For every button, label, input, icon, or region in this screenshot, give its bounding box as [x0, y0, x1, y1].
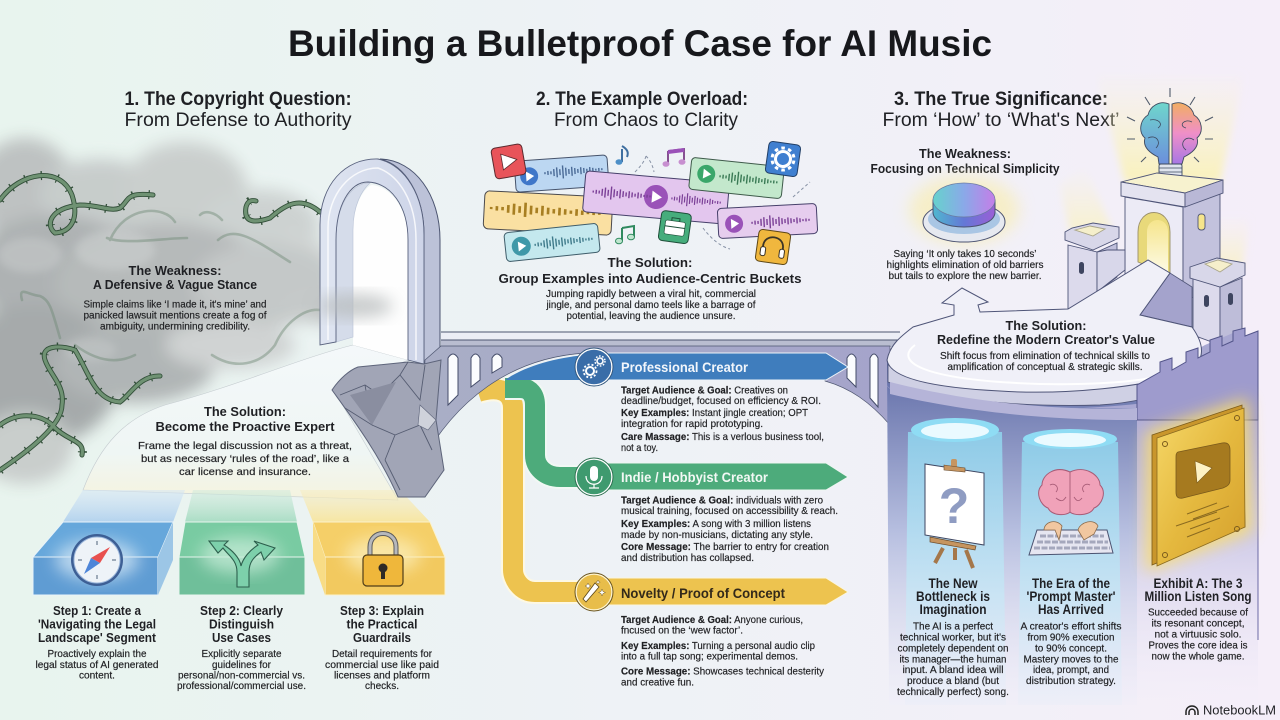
text: professional creator details: Target Audience & Goal: Creatives on — [621, 384, 788, 396]
text: section 1 weakness: panicked lawsuit mentions create a fog of — [84, 310, 267, 322]
text: professional creator details: Care Massage: This is a verlous business tool, — [621, 431, 824, 443]
text: section 2 solution: potential, leaving the audience unsure. — [566, 310, 736, 322]
panel: prompt master: A creator's effort shifts — [1020, 620, 1122, 632]
panel: exhibit A: Exhibit A: The 3 — [1154, 576, 1243, 591]
text: button caption: but tails to explore the new barrier. — [888, 270, 1042, 282]
icon: easel with question mark: ? — [939, 478, 969, 534]
castle — [1065, 173, 1245, 345]
icon: magic wand — [575, 573, 613, 611]
text: step 1 — [36, 603, 159, 682]
icon: microphone — [575, 458, 613, 496]
beams to steps — [63, 490, 430, 522]
card: purple right audio — [717, 203, 818, 239]
text: step 2 — [177, 603, 306, 692]
platform with arrow — [887, 260, 1240, 409]
panel: new bottleneck: produce a bland (but — [907, 675, 999, 687]
light rays behind bulb — [1060, 70, 1250, 268]
panel: prompt master: idea, prompt, and — [1033, 664, 1109, 676]
panel: new bottleneck: technically perfect) song. — [897, 686, 1009, 698]
text: indie creator details: Core Message: The barrier to entry for creation — [621, 541, 829, 553]
panel: new bottleneck: completely dependent on — [898, 642, 1009, 654]
text: button caption — [886, 248, 1044, 282]
step 3 block — [313, 522, 445, 595]
text: section 2 solution: The Solution: — [608, 255, 692, 270]
yellow track — [478, 389, 585, 592]
icon: padlock — [363, 534, 403, 586]
panel: new bottleneck: its manager—the human — [900, 654, 1007, 666]
text: step 2: personal/non-commercial vs. — [178, 670, 305, 682]
text: step 1: content. — [79, 670, 115, 682]
fog over door — [317, 294, 393, 318]
text: section 3 weakness: The Weakness: — [919, 146, 1011, 161]
text: section 3 solution — [937, 318, 1155, 373]
text: step 3: Detail requirements for — [332, 648, 432, 660]
text: button caption: highlights elimination of old barriers — [886, 259, 1044, 271]
icon: briefcase tile — [658, 210, 692, 244]
text: step 2: Use Cases — [212, 630, 271, 645]
text: section 3 solution: Shift focus from elimination of technical skills to — [940, 350, 1150, 362]
panel: new bottleneck: The AI is a perfect — [913, 620, 993, 632]
thorn vines — [0, 176, 320, 470]
fog cloud — [0, 138, 380, 484]
audio cards collage — [483, 141, 818, 265]
banner: novelty proof of concept — [575, 573, 848, 611]
text: step 1: 'Navigating the Legal — [38, 616, 156, 632]
text: section 3 weakness — [870, 146, 1060, 176]
heading: section 1 — [124, 89, 352, 131]
text: section 1 solution: but as necessary ‘rules of the road’, like a — [141, 453, 349, 465]
card: teal audio — [504, 223, 600, 262]
text: indie creator details — [621, 494, 838, 564]
panel: prompt master: Mastery moves to the — [1024, 654, 1119, 666]
cylinder tower body — [887, 333, 1258, 705]
panel: prompt master: distribution strategy. — [1026, 675, 1116, 687]
left turret — [1065, 223, 1125, 310]
logo: NotebookLM: NotebookLM — [1203, 702, 1276, 718]
panel: new bottleneck: technical worker, but it's — [900, 632, 1006, 644]
text: section 1 weakness — [84, 263, 267, 332]
panel: prompt master: 'Prompt Master' — [1026, 589, 1116, 604]
banner: professional creator: Professional Creator — [621, 359, 749, 375]
panel: new bottleneck: input. A bland idea will — [902, 664, 1004, 676]
icon: headphones tile — [755, 229, 791, 265]
text: step 3: licenses and platform — [334, 670, 430, 682]
heading: section 1: From Defense to Authority — [124, 110, 352, 131]
panel: prompt master — [1018, 429, 1122, 705]
text: step 3: the Practical — [346, 616, 418, 632]
bridge — [420, 332, 901, 465]
heading: section 2 — [536, 89, 748, 131]
text: section 1 weakness: Simple claims like ‘I made it, it's mine’ and — [84, 298, 267, 310]
banner: indie hobbyist creator: Indie / Hobbyist Creator — [621, 469, 769, 485]
panel: prompt master: The Era of the — [1032, 576, 1110, 591]
text: section 2 solution: Group Examples into Audience-Centric Buckets — [498, 271, 802, 286]
text: step 1: Landscape' Segment — [38, 630, 157, 645]
panel: new bottleneck: Imagination — [920, 602, 986, 617]
arch door — [320, 159, 440, 364]
rocky cliff — [332, 360, 444, 497]
text: step 2: Step 2: Clearly — [200, 603, 284, 618]
icon: gold plaque — [1152, 405, 1245, 566]
card: green audio — [689, 157, 784, 199]
panel: exhibit A: its resonant concept, — [1152, 618, 1244, 630]
text: novelty details: into a full tap song; experimental demos. — [621, 650, 798, 662]
text: professional creator details: Key Examples: Instant jingle creation; OPT — [621, 407, 809, 419]
text: step 1: Step 1: Create a — [53, 603, 142, 618]
text: section 1 weakness: ambiguity, undermining credibility. — [100, 320, 250, 332]
icon: compass — [71, 534, 123, 586]
panel: exhibit A: Succeeded because of — [1148, 606, 1248, 618]
title: Building a Bulletproof Case for AI Music — [288, 23, 992, 64]
heading: section 3: From ‘How’ to ‘What's Next’ — [882, 110, 1120, 131]
icon: dashed arrows — [635, 156, 810, 249]
icon: music notes — [616, 146, 686, 244]
heading: section 2: 2. The Example Overload: — [536, 89, 748, 110]
icon: brain lightbulb — [1127, 88, 1213, 182]
text: step 3 — [325, 603, 439, 692]
icon: easel with question mark — [925, 459, 984, 568]
text: professional creator details: not a toy. — [621, 442, 658, 454]
text: step 1: legal status of AI generated — [36, 659, 159, 671]
panel: exhibit A: Million Listen Song — [1144, 589, 1252, 604]
text: section 1 solution — [138, 404, 352, 478]
text: novelty details: and creative fun. — [621, 676, 694, 688]
panel: exhibit A: Proves the core idea is — [1148, 640, 1248, 652]
text: step 2: guidelines for — [212, 659, 271, 671]
text: section 1 solution: Frame the legal discussion not as a threat, — [138, 440, 352, 452]
text: step 3: Guardrails — [353, 630, 411, 645]
panel: prompt master: to 90% concept. — [1035, 642, 1107, 654]
light road from door — [83, 345, 408, 500]
panel: exhibit A: now the whole game. — [1152, 650, 1244, 662]
heading: section 2: From Chaos to Clarity — [554, 110, 738, 131]
panel: new bottleneck: The New — [928, 576, 978, 591]
panel: prompt master: Has Arrived — [1038, 602, 1104, 617]
text: button caption: Saying ‘It only takes 10 seconds’ — [894, 248, 1036, 260]
text: indie creator details: and distribution has collapsed. — [621, 552, 754, 564]
text: professional creator details: deadline/budget, focused on efficiency & ROI. — [621, 395, 821, 407]
fog highlights — [0, 230, 155, 362]
text: step 3: commercial use like paid — [325, 659, 439, 671]
text: section 1 weakness: The Weakness: — [128, 263, 222, 278]
heading: section 3 — [882, 89, 1120, 131]
right turret — [1190, 258, 1245, 345]
text: section 3 weakness: Focusing on Technical Simplicity — [870, 161, 1060, 176]
text: step 3: checks. — [365, 680, 399, 692]
text: step 1: Proactively explain the — [48, 648, 147, 660]
banner: indie hobbyist creator — [575, 458, 848, 496]
banner: novelty proof of concept: Novelty / Proof of Concept — [621, 585, 785, 601]
text: step 2: Distinguish — [209, 616, 274, 632]
text: indie creator details: Target Audience & Goal: individuals with zero — [621, 494, 823, 506]
text: novelty details: Key Examples: Turning a personal audio clip — [621, 640, 815, 652]
text: indie creator details: made by non-musicians, dictating any style. — [621, 529, 813, 541]
text: section 2 solution — [498, 255, 802, 322]
panel: new bottleneck — [897, 418, 1009, 705]
card: purple center audio — [582, 171, 729, 224]
text: professional creator details: integration for rapid prototyping. — [621, 418, 763, 430]
text: indie creator details: musical training, focused on accessibility & reach. — [621, 505, 838, 517]
panel: new bottleneck: Bottleneck is — [916, 589, 990, 604]
text: step 2: Explicitly separate — [202, 648, 282, 660]
text: novelty details: Target Audience & Goal: Anyone curious, — [621, 614, 803, 626]
icon: red play tile — [491, 143, 527, 179]
text: novelty details: fncused on the ‘wew factor’. — [621, 624, 743, 636]
green track — [505, 388, 585, 477]
text: section 1 solution: The Solution: — [204, 404, 286, 419]
panel: exhibit A: not a virtuusic solo. — [1154, 628, 1242, 640]
card: yellow waveform — [483, 191, 613, 235]
heading: section 3: 3. The True Significance: — [894, 89, 1108, 110]
card: blue audio — [514, 155, 609, 192]
text: section 2 solution: Jumping rapidly between a viral hit, commercial — [546, 288, 756, 300]
main tower — [1121, 173, 1223, 300]
text: section 1 solution: Become the Proactive Expert — [156, 419, 335, 434]
text: section 3 solution: amplification of conceptual & strategic skills. — [948, 361, 1142, 373]
text: indie creator details: Key Examples: A song with 3 million listens — [621, 518, 811, 530]
text: section 1 weakness: A Defensive & Vague Stance — [93, 277, 257, 292]
text: section 1 solution: car license and insurance. — [179, 466, 311, 478]
text: professional creator details — [621, 384, 824, 454]
icon: big button — [909, 176, 1019, 244]
text: section 3 solution: The Solution: — [1006, 318, 1086, 333]
heading: section 1: 1. The Copyright Question: — [124, 89, 352, 110]
icon: gear tile — [765, 141, 801, 177]
battlements — [890, 328, 1258, 420]
text: section 2 solution: jingle, and personal damo teels like a barrage of — [546, 299, 756, 311]
text: section 3 solution: Redefine the Modern Creator's Value — [937, 332, 1155, 347]
step 2 block — [179, 522, 305, 595]
text: step 3: Step 3: Explain — [340, 603, 424, 618]
panel: exhibit A — [1144, 398, 1252, 662]
step 1 block — [33, 522, 173, 595]
text: step 2: professional/commercial use. — [177, 680, 306, 692]
icon: fork arrows — [209, 541, 275, 587]
text: novelty details — [621, 614, 825, 688]
banner: professional creator — [505, 348, 848, 386]
icon: gears — [575, 348, 613, 386]
text: novelty details: Core Message: Showcases technical desterity — [621, 666, 825, 678]
icon: brain at keyboard — [1029, 470, 1113, 555]
panel: prompt master: from 90% execution — [1028, 632, 1115, 644]
